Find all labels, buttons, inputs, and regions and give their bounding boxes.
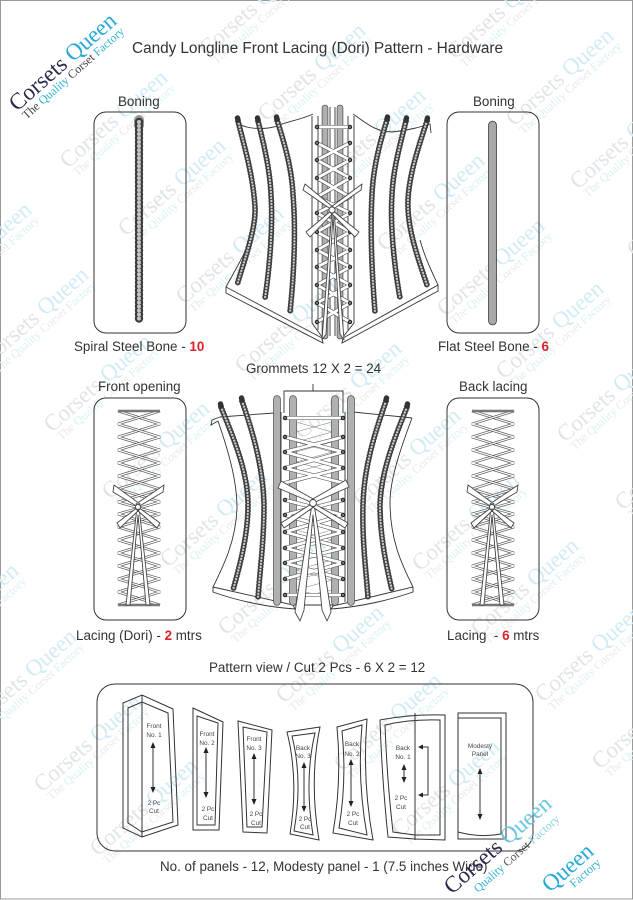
piece: back no. 3: Back xyxy=(296,745,311,752)
label: spiral steel bone count: Spiral Steel Bone - 10 xyxy=(74,339,204,354)
watermark pattern: The Quality Corset Factory xyxy=(228,548,336,646)
heading: front opening: Front opening xyxy=(98,379,181,394)
piece: front no. 2 xyxy=(193,708,223,830)
lacing xyxy=(285,418,343,595)
flat bones xyxy=(277,399,351,602)
logo: bottom right: Quality Corset Factory xyxy=(471,812,562,895)
icon: spiral bone xyxy=(134,120,144,320)
logo: bottom right clipped: Factory xyxy=(567,855,603,890)
piece: back no. 2: 2 Pc xyxy=(347,811,360,818)
piece: front no. 3: No. 3 xyxy=(246,745,262,752)
thin lacing xyxy=(296,422,332,598)
watermark pattern: The Quality Corset Factory xyxy=(170,480,278,578)
panel: back lacing xyxy=(447,398,539,620)
heading: back lacing: Back lacing xyxy=(459,379,527,394)
watermark pattern: The Quality Corset Factory xyxy=(506,292,614,390)
watermark pattern: The Quality Corset Factory xyxy=(304,352,412,450)
watermark pattern: The Quality Corset Factory xyxy=(363,419,471,517)
label: lacing dori: Lacing (Dori) - 2 mtrs xyxy=(76,628,202,643)
label: pattern view: Pattern view / Cut 2 Pcs - 6 X 2 = 12 xyxy=(209,660,425,675)
piece: front no. 2: Cut xyxy=(203,815,213,822)
label: lacing back: Lacing - 6 mtrs xyxy=(447,628,540,643)
title: Candy Longline Front Lacing (Dori) Pattern - Hardware xyxy=(132,40,503,57)
watermark pattern: Corsets Queen xyxy=(29,688,147,797)
piece: front no. 2: 2 Pc xyxy=(202,806,215,813)
watermark pattern: The Quality Corset Factory xyxy=(186,217,294,315)
panel: front opening lacing xyxy=(94,398,186,620)
piece: back no. 3 xyxy=(287,727,320,840)
piece: back no. 2: Cut xyxy=(348,820,358,827)
label: number of panels: No. of panels - 12, Modesty panel - 1 (7.5 inches Wide) xyxy=(160,859,488,874)
watermark pattern: The Quality Corset Factory xyxy=(328,99,436,197)
watermark pattern: Corsets Queen xyxy=(171,200,289,309)
piece: front no. 3: Cut xyxy=(251,820,261,827)
watermark pattern: Corsets Queen xyxy=(213,531,331,640)
watermark pattern: The Quality Corset Factory xyxy=(387,164,495,262)
piece: front no. 3 xyxy=(238,721,272,833)
piece: modesty panel: Panel xyxy=(472,751,488,758)
piece: back no. 3: Cut xyxy=(300,824,310,831)
watermark pattern: The Quality Corset Factory xyxy=(70,81,178,179)
piece: front no. 3: 2 Pc xyxy=(250,811,263,818)
watermark pattern: Corsets Queen xyxy=(85,752,203,861)
label: grommets: Grommets 12 X 2 = 24 xyxy=(246,361,382,376)
piece: back no. 2: No. 2 xyxy=(344,751,360,758)
watermark pattern: The Quality Corset Factory xyxy=(344,684,452,782)
piece: front no. 2: No. 2 xyxy=(199,740,215,747)
piece: back no. 1: No. 1 xyxy=(395,754,411,761)
piece: front no. 1 xyxy=(123,695,178,837)
watermark pattern: The Quality Corset Factory xyxy=(44,705,152,803)
watermark pattern: Corsets Queen xyxy=(387,733,505,842)
panel: flat steel bone xyxy=(447,112,539,333)
corset outline xyxy=(211,412,413,609)
lacing zigzag xyxy=(118,411,160,605)
lacing and bow xyxy=(467,411,518,605)
grommets xyxy=(315,125,352,324)
logo: bottom right clipped: Queen xyxy=(537,838,599,897)
watermark pattern: Corsets Queen xyxy=(348,402,466,511)
heading: boning left: Boning xyxy=(118,94,160,109)
corset outline xyxy=(226,114,438,343)
watermark pattern: Corsets Queen xyxy=(39,328,157,437)
watermark pattern: The Quality Corset Factory xyxy=(286,616,394,714)
heading: boning right: Boning xyxy=(473,94,515,109)
corset back view xyxy=(211,384,413,621)
icon: flat bone xyxy=(488,125,497,321)
bow xyxy=(113,485,164,605)
piece: front no. 1: 2 Pc xyxy=(148,800,161,807)
piece: back no. 3: No. 3 xyxy=(295,753,311,760)
grommets xyxy=(283,416,345,597)
watermark pattern: The Quality Corset Factory xyxy=(54,345,162,443)
watermark pattern: Corsets Queen xyxy=(466,532,584,641)
flat bones behind lacing xyxy=(325,107,340,336)
watermark pattern: Corsets Queen xyxy=(407,467,525,576)
watermark pattern: Corsets Queen xyxy=(155,463,273,572)
bow xyxy=(278,480,349,621)
spiral bones xyxy=(220,398,408,598)
watermark pattern: The Quality Corset Factory xyxy=(128,149,236,247)
piece: modesty panel: Modesty xyxy=(468,743,493,750)
watermark pattern: The Quality Corset Factory xyxy=(112,412,220,510)
piece: front no. 1: Cut xyxy=(149,808,159,815)
modesty panel bracket xyxy=(284,384,343,413)
watermark pattern: The Quality Corset Factory xyxy=(245,286,353,384)
piece: front no. 2: Front xyxy=(200,731,215,738)
logo: top left: The Quality Corset Factory xyxy=(19,24,127,122)
watermark pattern: Corsets Queen xyxy=(432,212,550,321)
watermark pattern: The Quality Corset Factory xyxy=(422,484,530,582)
watermark pattern: Corsets Queen xyxy=(97,395,215,504)
panel: pattern pieces xyxy=(97,684,533,851)
piece: back no. 2: Back xyxy=(345,741,360,748)
watermark pattern: Corsets Queen xyxy=(491,275,609,384)
piece: back no. 1: Cut xyxy=(396,804,406,811)
logo: bottom right: Corsets Queen xyxy=(439,790,557,899)
spiral bones xyxy=(237,117,428,312)
watermark pattern: The Quality Corset Factory xyxy=(268,34,376,132)
piece: modesty panel xyxy=(458,713,506,839)
label: flat steel bone count: Flat Steel Bone - 6 xyxy=(438,339,549,354)
watermark pattern: Corsets Queen xyxy=(372,147,490,256)
piece: back no. 1: 2 Pc xyxy=(395,795,408,802)
watermark pattern: Corsets Queen xyxy=(253,17,371,126)
watermark pattern: Corsets Queen xyxy=(501,22,619,131)
watermark pattern: The Quality Corset Factory xyxy=(516,39,624,137)
watermark pattern: Corsets Queen xyxy=(329,667,447,776)
panel: spiral steel bone xyxy=(94,112,186,333)
logo: top left: Corsets Queen xyxy=(4,7,122,116)
watermark pattern: Corsets Queen xyxy=(113,132,231,241)
piece: back no. 1 xyxy=(380,713,445,840)
bow xyxy=(303,184,362,340)
watermark pattern: Corsets Queen xyxy=(55,64,173,173)
lacing xyxy=(317,127,350,322)
piece: front no. 3: Front xyxy=(247,736,262,743)
watermark pattern: Corsets Queen xyxy=(271,599,389,708)
watermark pattern: The Quality Corset Factory xyxy=(402,750,510,848)
watermark pattern: The Quality Corset Factory xyxy=(100,769,208,867)
piece: front no. 1: Front xyxy=(147,723,162,730)
piece: back no. 1: Back xyxy=(396,745,411,752)
watermark pattern: Corsets Queen xyxy=(230,269,348,378)
piece: back no. 2 xyxy=(333,719,373,840)
piece: front no. 1: No. 1 xyxy=(146,732,162,739)
watermark pattern: Corsets Queen xyxy=(313,82,431,191)
piece: back no. 3: 2 Pc xyxy=(299,816,312,823)
corset front view xyxy=(226,107,438,343)
watermark pattern: The Quality Corset Factory xyxy=(447,229,555,327)
watermark pattern: Corsets Queen xyxy=(289,335,407,444)
watermark pattern: The Quality Corset Factory xyxy=(481,549,589,647)
